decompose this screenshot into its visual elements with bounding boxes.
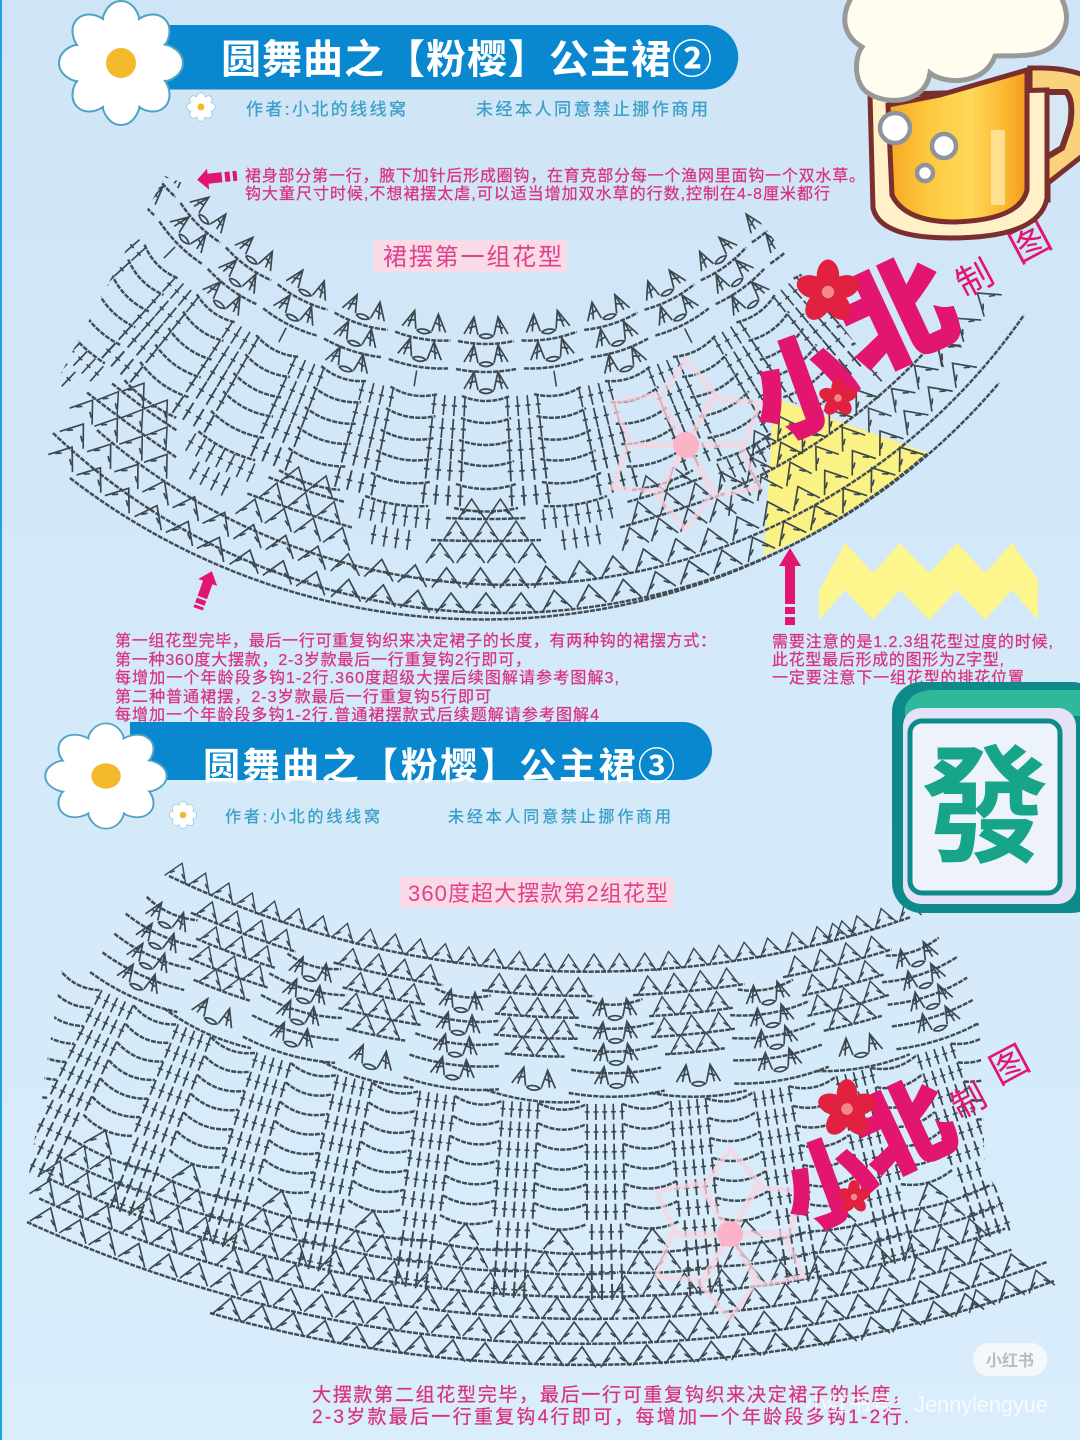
chart 1 column rows xyxy=(61,239,882,550)
chart 2 hem triangle rows xyxy=(27,1125,1055,1367)
foam xyxy=(845,0,1066,100)
note below chart 2: 2-3岁款最后一行重复钩4行即可，每增加一个年龄段多钩1-2行. xyxy=(312,1406,909,1428)
arrow up to hem row xyxy=(189,568,221,612)
note below chart 2 xyxy=(312,1384,911,1428)
pale pink flower watermark chart 1 xyxy=(597,360,775,530)
icon: beer mug sticker xyxy=(845,0,1080,238)
tile face backing xyxy=(903,708,1076,904)
watermark chart 1: 小北制图: 小 xyxy=(736,317,873,461)
watermark chart 1: 小北制图: 北 xyxy=(823,239,972,394)
beer fill xyxy=(888,70,1027,222)
watermark chart 2: 小北制图: 图 xyxy=(983,1038,1037,1093)
note: hem options: 第一组花型完毕，最后一行可重复钩织来决定裙子的长度，有两种钩的裙摆方式： xyxy=(115,632,716,650)
chart 1 triangle rows xyxy=(48,282,1024,619)
arrow up to yellow triangle xyxy=(779,548,801,625)
watermark chart 1: 小北制图: 制 xyxy=(949,252,1000,305)
watermark chart 2: 小北制图: 制 xyxy=(945,1077,993,1127)
mug body xyxy=(870,90,1047,238)
small daisy icon 1 xyxy=(187,93,215,121)
note: hem options: 每增加一个年龄段多钩1-2行.360度超级大摆后续图解请参考图解3, xyxy=(115,669,619,687)
watermark chart 2: 小北制图 xyxy=(769,1038,1037,1249)
chart 2 fans and gap chains xyxy=(89,896,979,1104)
large daisy icon 1 xyxy=(59,1,183,125)
arrow pointing left to first row xyxy=(196,166,238,191)
title bar 1 xyxy=(150,25,738,90)
note below chart 2: 大摆款第二组花型完毕，最后一行可重复钩织来决定裙子的长度， xyxy=(312,1384,911,1406)
chart 2 top triangle rows xyxy=(164,859,922,1057)
tile face xyxy=(910,721,1060,893)
title 1: 圆舞曲之【粉樱】公主裙② xyxy=(221,38,712,82)
watermark chart 2: 小北制图: 北 xyxy=(842,1065,969,1197)
label: 360 degree second group: 360度超大摆款第2组花型 xyxy=(408,881,668,906)
tile outer shell xyxy=(892,682,1080,913)
note: Z shape: 此花型最后形成的图形为Z字型, xyxy=(772,651,1004,669)
header 1: flower and title bar xyxy=(59,1,738,125)
large daisy icon 2 xyxy=(45,723,167,829)
tile top band xyxy=(905,690,1080,716)
crochet chart 1 xyxy=(48,176,1025,621)
note above chart 1: 钩大童尺寸时候,不想裙摆太虐,可以适当增加双水草的行数,控制在4-8厘米都行 xyxy=(245,184,830,203)
left edge strip xyxy=(0,0,2,1440)
author line 2: 作者:小北的线线窝 xyxy=(225,808,380,826)
chart 2 chain scallops xyxy=(0,913,1080,1320)
note above chart 1 xyxy=(245,167,865,203)
note: hem options: 第二种普通裙摆，2-3岁款最后一行重复钩5行即可 xyxy=(115,688,491,706)
note: hem options: 第一种360度大摆款，2-3岁款最后一行重复钩2行即可， xyxy=(115,651,531,669)
yellow zigzag shape xyxy=(819,543,1038,620)
header 2: flower and title bar xyxy=(45,722,712,829)
platform logo badge xyxy=(973,1343,1047,1376)
platform logo badge: 小红书 xyxy=(986,1351,1034,1370)
bubbles xyxy=(880,113,910,143)
note: hem options: 每增加一个年龄段多钩1-2行.普通裙摆款式后续题解请参考图解4 xyxy=(115,706,599,724)
copyright line 1: 未经本人同意禁止挪作商用 xyxy=(476,100,708,119)
icon: mahjong tile 發 xyxy=(892,682,1080,913)
pale pink flower watermark chart 2 xyxy=(641,1149,819,1319)
chart 1 stitch columns and fans xyxy=(61,176,882,550)
chart 2 column rows xyxy=(29,990,1010,1300)
mug handle xyxy=(1030,68,1080,200)
yellow highlight triangle xyxy=(764,398,928,555)
tile character: 發 xyxy=(921,704,1049,889)
note: hem options xyxy=(115,632,716,724)
chart 2 stitch area xyxy=(29,896,1012,1320)
author line 1: 作者:小北的线线窝 xyxy=(246,100,406,119)
note: Z shape: 一定要注意下一组花型的排花位置 xyxy=(772,668,1024,687)
note: Z shape xyxy=(772,632,1053,687)
beer highlight xyxy=(991,130,1005,205)
copyright line 2: 未经本人同意禁止挪作商用 xyxy=(448,807,671,826)
chart 1 chain scallops and fans xyxy=(77,176,856,513)
label: first pattern group: 裙摆第一组花型 xyxy=(383,244,562,271)
note: Z shape: 需要注意的是1.2.3组花型过度的时候, xyxy=(772,632,1053,651)
watermark chart 2: 小北制图: 小 xyxy=(769,1121,891,1249)
watermark chart 1: 小北制图 xyxy=(736,214,1058,461)
title 2: 圆舞曲之【粉樱】公主裙③ xyxy=(203,746,675,787)
small daisy icon 2 xyxy=(169,801,197,829)
platform id watermark: 小红书号：Jennylengyue xyxy=(805,1392,1048,1417)
title bar 2 xyxy=(130,722,712,780)
watermark chart 1: 小北制图: 图 xyxy=(1002,214,1058,272)
crochet chart 2 xyxy=(26,862,1056,1368)
note above chart 1: 裙身部分第一行，腋下加针后形成圈钩，在育克部分每一个渔网里面钩一个双水草。 xyxy=(245,167,865,185)
